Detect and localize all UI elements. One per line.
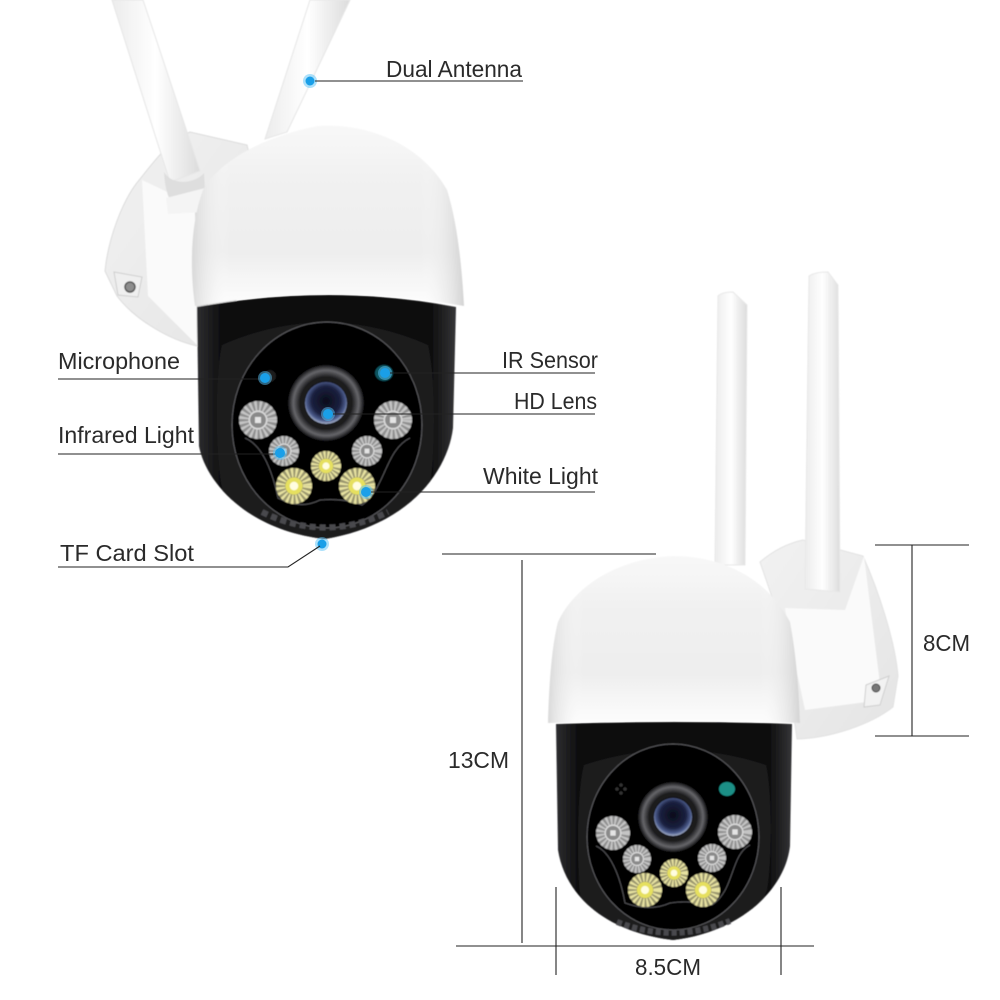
callout: Dual Antenna: Dual Antenna <box>386 56 522 82</box>
dimension: mount 8CM: 8CM <box>923 630 970 656</box>
IR sensor <box>375 365 393 381</box>
face plate <box>587 744 759 930</box>
camera: front view with callouts <box>105 0 464 560</box>
microphone holes <box>264 370 276 382</box>
callout: HD Lens: HD Lens <box>514 388 597 414</box>
LEDs <box>239 401 277 439</box>
callout: IR Sensor: IR Sensor <box>502 347 598 373</box>
LED panel outline <box>596 845 750 908</box>
wall mount <box>105 132 260 346</box>
vents <box>262 512 388 528</box>
camera: rear-angled view with dimensions <box>548 272 898 960</box>
callout: Microphone: Microphone <box>58 348 180 374</box>
black body <box>556 722 792 940</box>
callout: Microphone <box>58 348 272 385</box>
side panels <box>217 322 434 560</box>
LED panel outline <box>245 438 410 505</box>
lens <box>638 782 708 852</box>
callout: TF Card Slot <box>58 537 329 567</box>
callout: White Light <box>359 463 599 499</box>
side panels <box>578 750 771 960</box>
callout: IR Sensor <box>378 347 598 380</box>
IR sensor <box>719 782 735 796</box>
microphone holes <box>615 783 627 795</box>
vents <box>617 921 730 933</box>
callout: Infrared Light: Infrared Light <box>58 422 195 448</box>
face plate <box>232 322 422 528</box>
dome <box>548 556 800 723</box>
callout: HD Lens <box>321 388 597 421</box>
LEDs <box>596 816 630 850</box>
dome <box>192 126 464 306</box>
black body <box>197 295 456 539</box>
antennas <box>112 0 200 182</box>
dimension: height 13CM: 13CM <box>448 747 509 773</box>
callout: Infrared Light <box>58 422 287 460</box>
callout: Dual Antenna <box>303 56 523 88</box>
lens <box>288 365 364 441</box>
wall mount <box>760 540 898 739</box>
callout: TF Card Slot: TF Card Slot <box>60 540 195 566</box>
callout: White Light: White Light <box>483 463 599 489</box>
dimension: width 8.5CM: 8.5CM <box>635 954 701 980</box>
antennas <box>715 292 747 565</box>
